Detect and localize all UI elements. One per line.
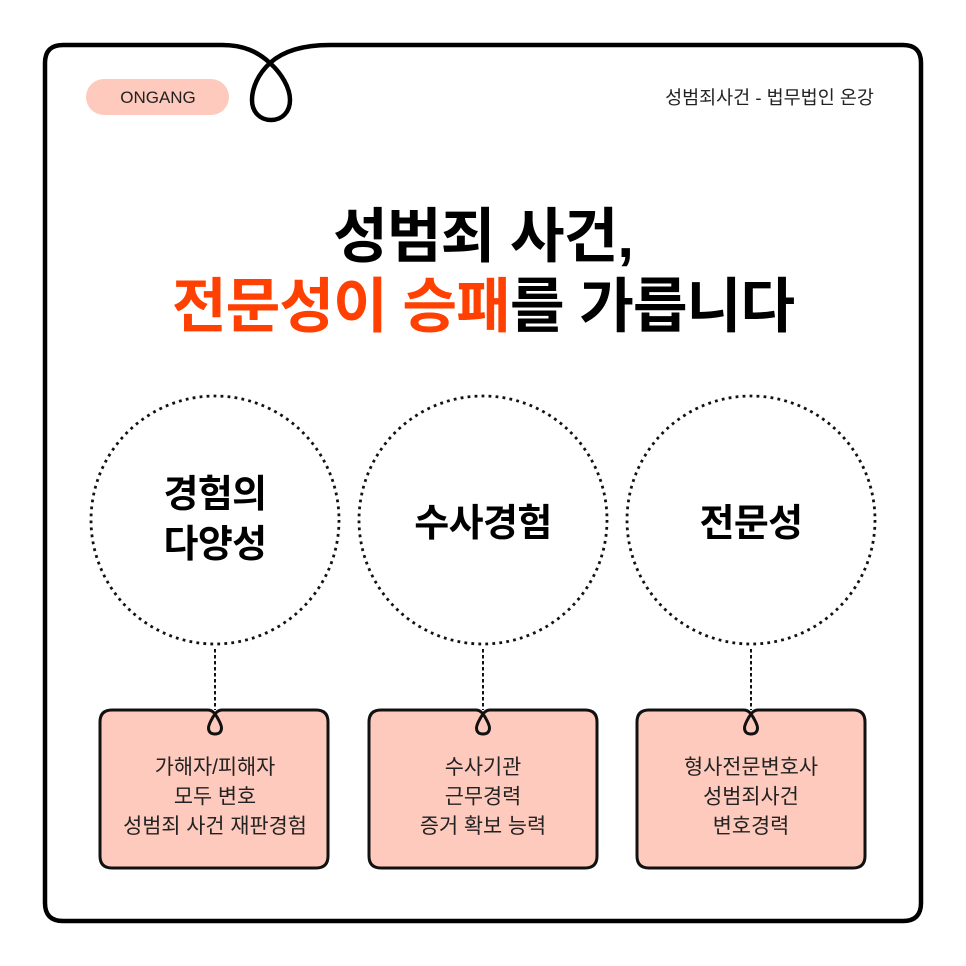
card 1: 가해자/피해자 (155, 756, 275, 779)
card 1 (100, 710, 328, 868)
connector 2 (482, 649, 484, 710)
circle: 경험의 다양성 (91, 396, 339, 644)
card 3 (637, 710, 865, 868)
circle: 수사경험: 수사경험 (414, 503, 552, 545)
badge: ONGANG (86, 79, 229, 115)
card 1: 성범죄 사건 재판경험 (123, 815, 307, 838)
circle: 경험의 다양성: 경험의 (163, 474, 267, 516)
badge: ONGANG: ONGANG (120, 88, 196, 107)
circle: 전문성 (627, 396, 875, 644)
title: 전문성이 승패를 가릅니다 (172, 273, 794, 340)
card 2: 수사기관 (445, 756, 521, 779)
connector 1 (214, 649, 216, 710)
card 3: 형사전문변호사 (684, 756, 818, 779)
title (172, 203, 794, 340)
circle: 수사경험 (359, 396, 607, 644)
connector 3 (750, 649, 752, 710)
card 3: 성범죄사건 (703, 786, 799, 808)
card 2: 증거 확보 능력 (420, 815, 546, 838)
title: 성범죄 사건, (333, 203, 633, 270)
header label: 성범죄사건 - 법무법인 온강 (665, 87, 874, 108)
card 2: 근무경력 (445, 786, 521, 808)
card 2 (369, 710, 597, 868)
card 3: 변호경력 (713, 815, 789, 838)
circle: 경험의 다양성: 다양성 (163, 524, 267, 566)
card 1: 모두 변호 (174, 786, 256, 808)
circle: 전문성: 전문성 (699, 503, 803, 545)
